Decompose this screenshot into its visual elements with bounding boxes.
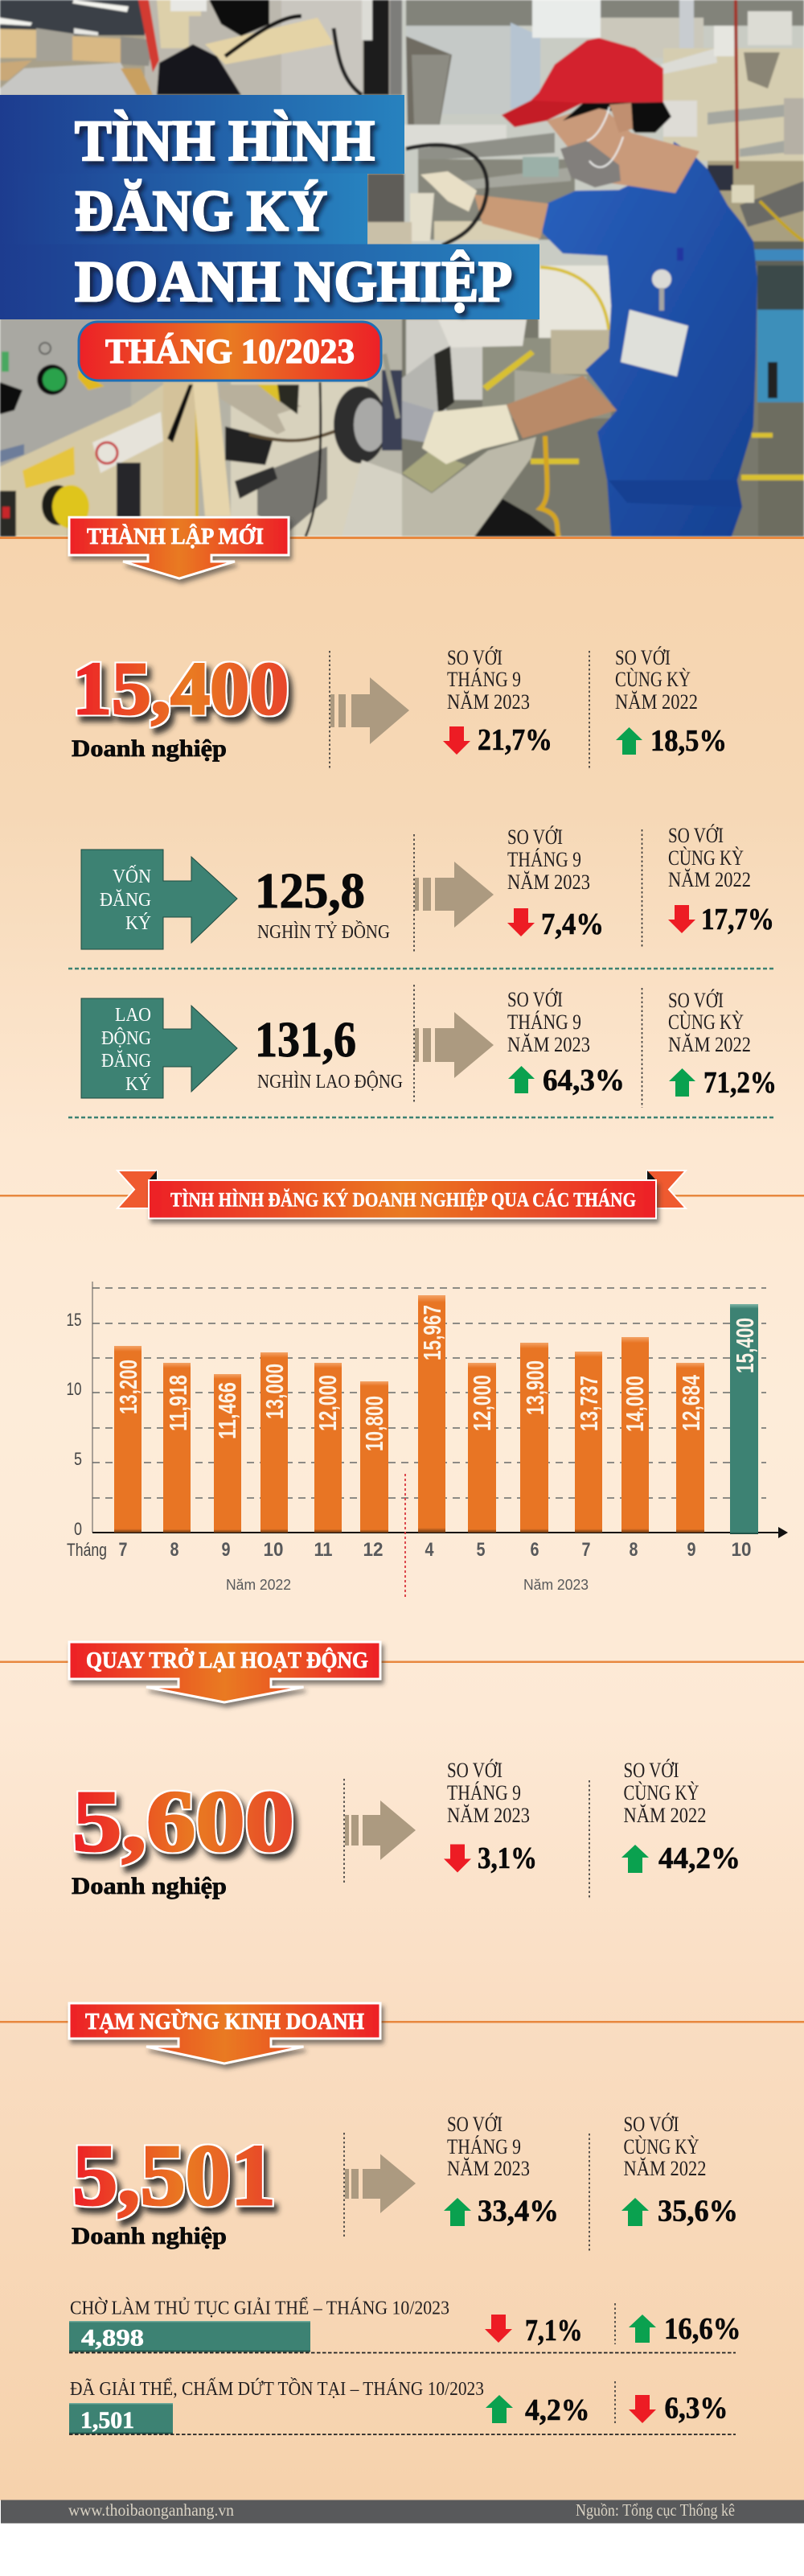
- comparison: labour vs September, up 64,3%: SO VỚI: [507, 988, 563, 1011]
- comparison: returning vs September, down 3,1%: THÁNG 9: [447, 1781, 521, 1804]
- bar chart: registrations by month: 11,918: [164, 1375, 192, 1431]
- comparison: vs September 2023, down 21,7%: SO VỚI: [447, 646, 503, 669]
- green arrow label: lao động đăng ký: KÝ: [125, 1074, 151, 1095]
- bar chart: registrations by month: 10: [264, 1539, 283, 1561]
- bar chart: registrations by month: 5: [74, 1449, 82, 1469]
- row: awaiting dissolution 4,898: CHỜ LÀM THỦ TỤC GIẢI THỂ – THÁNG 10/2023: [70, 2298, 449, 2319]
- row: dissolved 1,501: [69, 2378, 736, 2434]
- bar chart: registrations by month: 12,000: [468, 1375, 496, 1431]
- comparison: returning vs September, down 3,1%: 3,1%: [478, 1841, 537, 1875]
- divider and arrow: capital: [414, 834, 494, 953]
- title: TÌNH HÌNH ĐĂNG KÝ DOANH NGHIỆP: DOANH NGHIỆP: [75, 249, 512, 314]
- bar chart: registrations by month: 11: [314, 1539, 333, 1561]
- key figure: 5,600 doanh nghiệp: [72, 1774, 294, 1899]
- comparison: capital vs 2022, down 17,7%: NĂM 2022: [668, 868, 751, 891]
- key figure: 5,501 doanh nghiệp: 5,501: [72, 2128, 276, 2224]
- comparison: returning vs 2022, up 44,2%: NĂM 2022: [624, 1804, 706, 1827]
- comparison: capital vs September, down 7,4%: NĂM 2023: [507, 870, 590, 894]
- bar chart: registrations by month: 4: [425, 1539, 434, 1561]
- green arrow label: lao động đăng ký: [81, 998, 237, 1098]
- bar chart: registrations by month: 8: [170, 1539, 178, 1561]
- green arrow label: vốn đăng ký: [81, 850, 237, 949]
- bar chart: registrations by month: 6: [531, 1539, 539, 1561]
- comparison: suspended vs 2022, up 35,6%: SO VỚI: [624, 2113, 679, 2136]
- comparison: suspended vs September, up 33,4%: 33,4%: [478, 2195, 559, 2228]
- comparison: labour vs September, up 64,3%: 64,3%: [543, 1064, 625, 1097]
- date pill: THÁNG 10/2023: THÁNG 10/2023: [105, 333, 355, 371]
- comparison: suspended vs September, up 33,4%: SO VỚI: [447, 2113, 503, 2136]
- comparison: capital vs 2022, down 17,7%: [642, 824, 774, 949]
- comparison: labour vs September, up 64,3%: [507, 988, 625, 1097]
- section tag: QUAY TRỞ LẠI HOẠT ĐỘNG: [69, 1642, 380, 1702]
- bar chart: registrations by month: [66, 1282, 788, 1597]
- comparison: vs same period 2022, up 18,5%: [589, 646, 727, 770]
- bar chart: registrations by month: 7: [119, 1539, 127, 1561]
- green arrow label: vốn đăng ký: KÝ: [125, 913, 151, 934]
- divider and arrow: returning firms: [344, 1779, 416, 1885]
- comparison: labour vs 2022, up 71,2%: CÙNG KỲ: [668, 1010, 744, 1034]
- comparison: vs September 2023, down 21,7%: [443, 646, 552, 757]
- figure: 131,6 nghìn lao động: 131,6: [255, 1013, 356, 1068]
- comparison: capital vs September, down 7,4%: SO VỚI: [507, 825, 563, 849]
- comparison: suspended vs September, up 33,4%: NĂM 2023: [447, 2157, 530, 2180]
- comparison: suspended vs September, up 33,4%: [444, 2113, 559, 2228]
- comparison: capital vs 2022, down 17,7%: SO VỚI: [668, 824, 724, 847]
- bar chart: registrations by month: 12,684: [677, 1374, 705, 1431]
- comparison: vs same period 2022, up 18,5%: CÙNG KỲ: [615, 668, 691, 691]
- row: awaiting dissolution 4,898: [69, 2298, 741, 2352]
- comparison: labour vs 2022, up 71,2%: NĂM 2022: [668, 1033, 751, 1056]
- comparison: suspended vs September, up 33,4%: THÁNG 9: [447, 2135, 521, 2158]
- comparison: returning vs September, down 3,1%: [444, 1759, 537, 1875]
- figure: 131,6 nghìn lao động: [255, 1013, 403, 1093]
- comparison: capital vs September, down 7,4%: THÁNG 9: [507, 848, 581, 871]
- bar chart: registrations by month: 10: [732, 1539, 751, 1561]
- bar chart: registrations by month: 13,000: [260, 1364, 289, 1419]
- bar chart: registrations by month: 7: [582, 1539, 590, 1561]
- footer bar: website and source: Nguồn: Tổng cục Thống kê: [576, 2500, 735, 2520]
- title: TÌNH HÌNH ĐĂNG KÝ DOANH NGHIỆP: ĐĂNG KÝ: [75, 179, 327, 243]
- green arrow label: vốn đăng ký: ĐĂNG: [100, 890, 151, 911]
- bar chart: registrations by month: 15: [66, 1310, 82, 1330]
- comparison: returning vs 2022, up 44,2%: CÙNG KỲ: [624, 1781, 699, 1804]
- bar chart: registrations by month: 13,200: [114, 1360, 142, 1414]
- bar chart: registrations by month: 12: [363, 1539, 383, 1561]
- title: TÌNH HÌNH ĐĂNG KÝ DOANH NGHIỆP: [75, 109, 512, 314]
- divider and arrow: labour: [414, 985, 494, 1104]
- footer bar: website and source: www.thoibaonganhang.vn: [68, 2500, 234, 2520]
- green arrow label: lao động đăng ký: ĐĂNG: [101, 1051, 151, 1072]
- title: TÌNH HÌNH ĐĂNG KÝ DOANH NGHIỆP: TÌNH HÌNH: [75, 109, 375, 173]
- bar chart: registrations by month: 5: [476, 1539, 486, 1561]
- comparison: vs same period 2022, up 18,5%: SO VỚI: [615, 646, 671, 669]
- section tag: THÀNH LẬP MỚI: [69, 517, 289, 578]
- comparison: labour vs 2022, up 71,2%: 71,2%: [704, 1066, 777, 1100]
- ribbon heading: monthly registrations: TÌNH HÌNH ĐĂNG KÝ DOANH NGHIỆP QUA CÁC THÁNG: [170, 1189, 636, 1212]
- comparison: suspended vs 2022, up 35,6%: 35,6%: [658, 2195, 738, 2228]
- comparison: returning vs September, down 3,1%: SO VỚI: [447, 1759, 503, 1782]
- bar chart: registrations by month: 9: [222, 1539, 230, 1561]
- section tag: TẠM NGỪNG KINH DOANH: TẠM NGỪNG KINH DOANH: [85, 2010, 364, 2035]
- divider and arrow: suspended firms: [344, 2133, 416, 2239]
- bar chart: registrations by month: Năm 2023: [523, 1577, 589, 1593]
- comparison: vs September 2023, down 21,7%: 21,7%: [478, 723, 552, 757]
- comparison: returning vs 2022, up 44,2%: SO VỚI: [624, 1759, 679, 1782]
- section tag: TẠM NGỪNG KINH DOANH: [69, 2003, 380, 2064]
- bar chart: registrations by month: 9: [687, 1539, 696, 1561]
- orange rule under photo: [0, 537, 804, 539]
- comparison: suspended vs 2022, up 35,6%: [589, 2113, 738, 2253]
- section tag: QUAY TRỞ LẠI HOẠT ĐỘNG: QUAY TRỞ LẠI HOẠT ĐỘNG: [86, 1648, 368, 1673]
- key figure: 5,600 doanh nghiệp: Doanh nghiệp: [72, 1873, 227, 1899]
- page background: [0, 537, 804, 2500]
- comparison: labour vs 2022, up 71,2%: SO VỚI: [668, 989, 724, 1012]
- bar chart: registrations by month: 11,466: [213, 1382, 241, 1439]
- bar chart: registrations by month: 10,800: [360, 1396, 388, 1451]
- figure: 125,8 nghìn tỷ đồng: 125,8: [255, 864, 365, 919]
- row: dissolved 1,501: ĐÃ GIẢI THỂ, CHẤM DỨT TỒN TẠI – THÁNG 10/2023: [70, 2378, 484, 2400]
- comparison: vs September 2023, down 21,7%: NĂM 2023: [447, 690, 530, 714]
- bar chart: registrations by month: 10: [66, 1379, 82, 1399]
- bar chart: registrations by month: 0: [74, 1519, 82, 1539]
- comparison: suspended vs 2022, up 35,6%: NĂM 2022: [624, 2157, 706, 2180]
- comparison: returning vs September, down 3,1%: NĂM 2023: [447, 1804, 530, 1827]
- key figure: 15,400 doanh nghiệp: Doanh nghiệp: [72, 735, 227, 762]
- bar chart: registrations by month: 13,900: [521, 1360, 549, 1415]
- date pill: THÁNG 10/2023: [79, 322, 381, 381]
- key figure: 15,400 doanh nghiệp: 15,400: [72, 648, 289, 730]
- bar chart: registrations by month: 13,737: [575, 1376, 603, 1431]
- divider and arrow: new firms: [330, 651, 409, 770]
- bar chart: registrations by month: Năm 2022: [226, 1577, 291, 1593]
- figure: 125,8 nghìn tỷ đồng: NGHÌN TỶ ĐỒNG: [257, 921, 390, 943]
- hero photo: factory worker at machine: [0, 0, 804, 537]
- green arrow label: lao động đăng ký: ĐỘNG: [101, 1027, 151, 1049]
- section tag: THÀNH LẬP MỚI: THÀNH LẬP MỚI: [87, 525, 264, 549]
- figure: 125,8 nghìn tỷ đồng: [255, 864, 390, 943]
- comparison: capital vs September, down 7,4%: 7,4%: [541, 907, 604, 941]
- bar chart: registrations by month: 15,400: [731, 1318, 759, 1373]
- row: dissolved 1,501: 1,501: [80, 2407, 134, 2434]
- comparison: labour vs September, up 64,3%: NĂM 2023: [507, 1033, 590, 1056]
- row: dissolved 1,501: 4,2%: [525, 2393, 590, 2427]
- row: awaiting dissolution 4,898: 7,1%: [525, 2314, 582, 2348]
- bar chart: registrations by month: Tháng: [67, 1540, 107, 1560]
- key figure: 5,501 doanh nghiệp: Doanh nghiệp: [72, 2223, 227, 2249]
- bar chart: registrations by month: 15,967: [418, 1305, 446, 1360]
- key figure: 5,600 doanh nghiệp: 5,600: [72, 1774, 294, 1870]
- row: awaiting dissolution 4,898: 16,6%: [664, 2312, 741, 2346]
- ribbon heading: monthly registrations: [117, 1171, 686, 1218]
- comparison: vs same period 2022, up 18,5%: NĂM 2022: [615, 690, 698, 714]
- comparison: returning vs 2022, up 44,2%: [589, 1759, 740, 1899]
- comparison: vs same period 2022, up 18,5%: 18,5%: [650, 724, 727, 758]
- row: dissolved 1,501: 6,3%: [664, 2391, 728, 2425]
- green arrow label: vốn đăng ký: VỐN: [113, 866, 151, 887]
- comparison: capital vs 2022, down 17,7%: CÙNG KỲ: [668, 846, 744, 870]
- comparison: labour vs 2022, up 71,2%: [642, 988, 777, 1108]
- key figure: 15,400 doanh nghiệp: [72, 648, 289, 762]
- bar chart: registrations by month: 8: [629, 1539, 638, 1561]
- row: awaiting dissolution 4,898: 4,898: [81, 2325, 144, 2351]
- comparison: returning vs 2022, up 44,2%: 44,2%: [658, 1841, 740, 1875]
- comparison: capital vs 2022, down 17,7%: 17,7%: [701, 903, 774, 936]
- green arrow label: lao động đăng ký: LAO: [115, 1005, 151, 1026]
- bar chart: registrations by month: 12,000: [314, 1375, 342, 1431]
- comparison: labour vs September, up 64,3%: THÁNG 9: [507, 1010, 581, 1034]
- comparison: capital vs September, down 7,4%: [507, 825, 604, 941]
- footer bar: website and source: [1, 2500, 804, 2523]
- figure: 131,6 nghìn lao động: NGHÌN LAO ĐỘNG: [257, 1071, 403, 1093]
- bar chart: registrations by month: 14,000: [621, 1376, 649, 1432]
- comparison: suspended vs 2022, up 35,6%: CÙNG KỲ: [624, 2135, 699, 2158]
- title banner: blue stepped bands: [0, 95, 539, 319]
- comparison: vs September 2023, down 21,7%: THÁNG 9: [447, 668, 521, 691]
